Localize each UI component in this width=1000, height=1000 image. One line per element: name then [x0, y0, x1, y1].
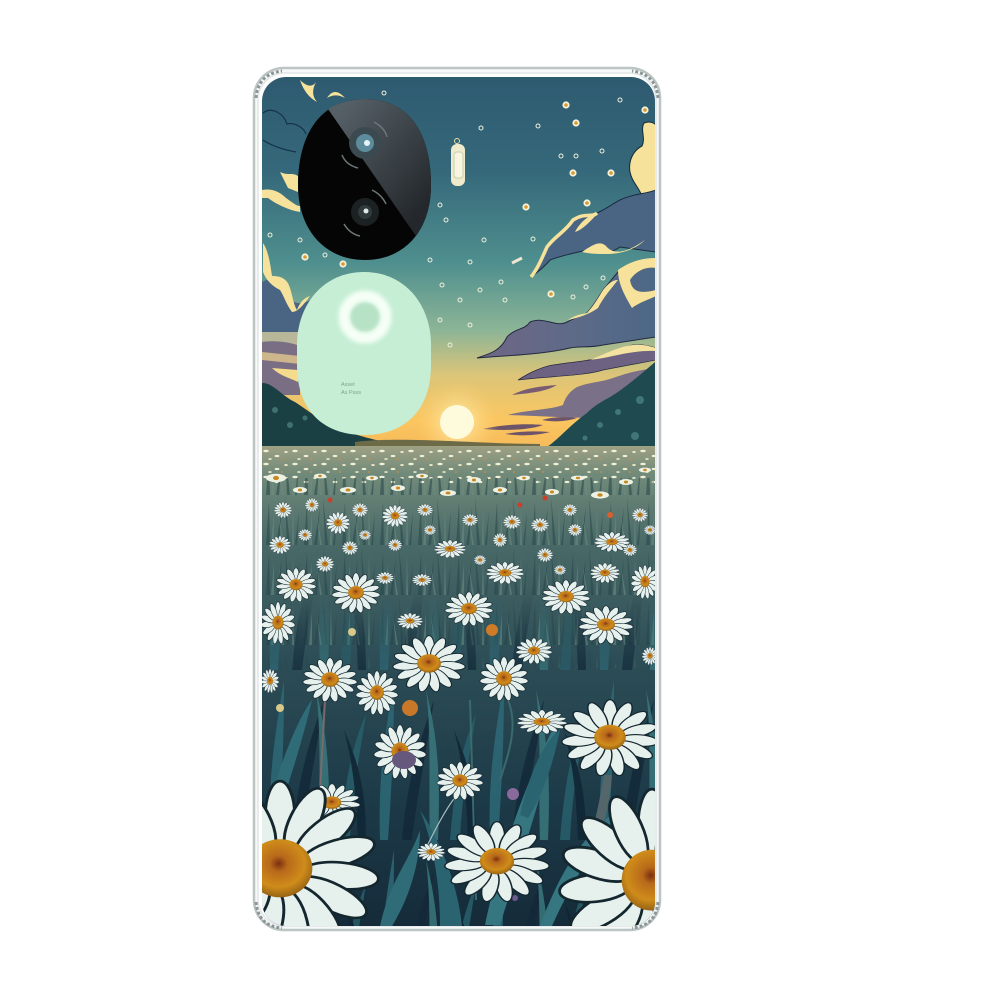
large daisy bottom right	[558, 788, 655, 926]
flash module	[451, 138, 465, 186]
sky	[262, 77, 655, 452]
upper lens	[342, 122, 387, 168]
clear case frame	[254, 68, 660, 930]
sun with glow	[426, 394, 496, 442]
distant tree lines	[262, 362, 655, 450]
clouds: right side	[477, 122, 658, 435]
meadow ground	[262, 446, 655, 926]
small distant daisies	[266, 468, 656, 901]
clouds: left side	[262, 80, 345, 395]
phone case product illustration	[252, 66, 662, 932]
camera island	[298, 99, 431, 260]
mid-distance grass	[262, 478, 655, 668]
mint light module	[297, 272, 431, 435]
far flower band	[262, 448, 655, 484]
module small print: As Pass	[341, 390, 361, 396]
glowing ring	[344, 296, 386, 338]
stars and drifting petals	[268, 91, 649, 347]
lower lens	[344, 190, 386, 236]
module small print: Asset	[341, 382, 355, 388]
mid and foreground daisies	[261, 505, 659, 903]
artwork: sunset daisy meadow	[262, 77, 655, 926]
module small print	[341, 382, 361, 396]
foreground grass	[262, 590, 655, 926]
large daisy bottom left	[262, 780, 380, 926]
